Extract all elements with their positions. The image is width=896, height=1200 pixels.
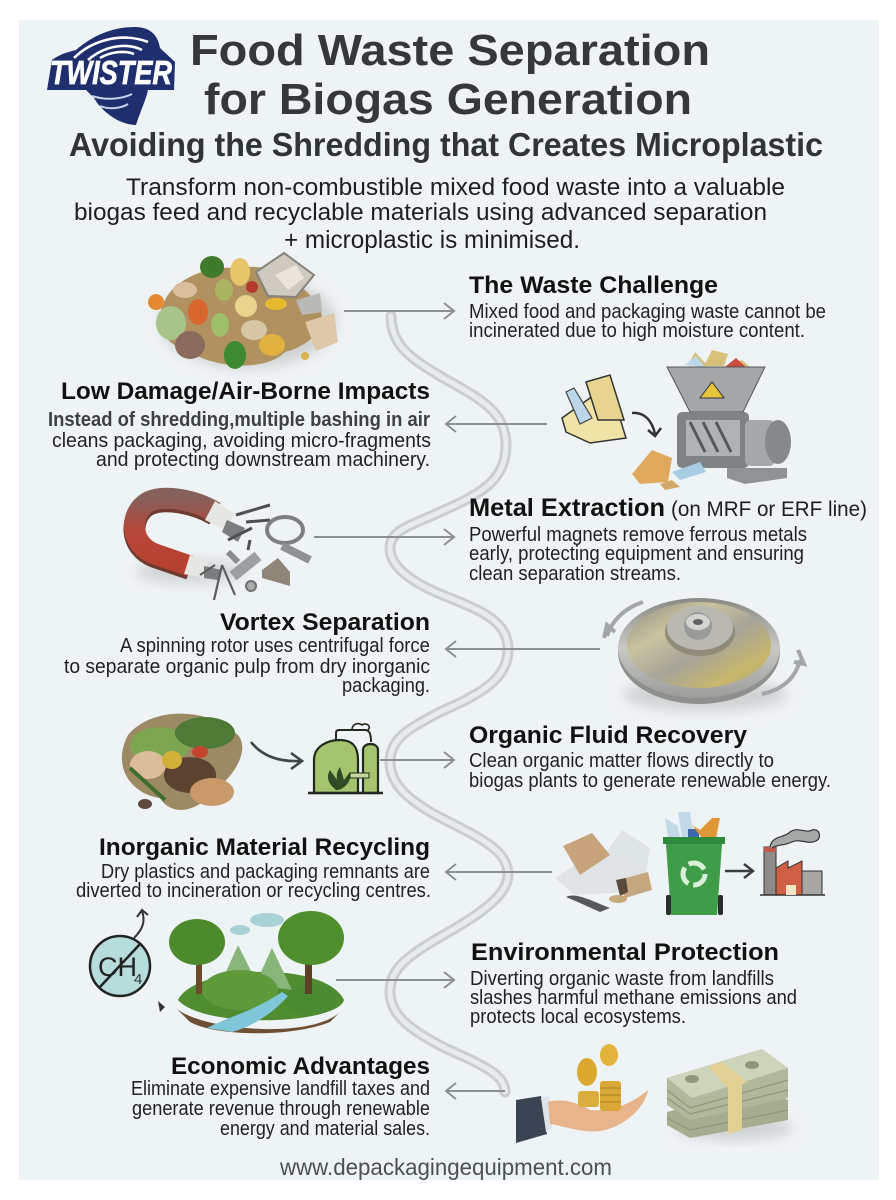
text: metal extraction: Metal Extraction <box>469 494 665 522</box>
text: metal extraction: early, protecting equipment and ensuring <box>469 543 804 565</box>
icon: mixed food waste pile <box>148 253 338 369</box>
text: inorganic material recycling: Dry plastics and packaging remnants are <box>101 861 430 883</box>
text: vortex separation: A spinning rotor uses centrifugal force <box>120 635 430 657</box>
text: environmental protection <box>470 939 797 1028</box>
text: economic advantages: generate revenue through renewable <box>132 1098 430 1120</box>
subtitle: Avoiding the Shredding that Creates Microplastic <box>69 126 823 163</box>
text: inorganic material recycling: Inorganic Material Recycling <box>99 834 430 861</box>
icon: packaging, recycling bin and factory <box>555 812 825 915</box>
arrow: shredder to low damage <box>446 416 547 432</box>
text: organic fluid recovery: Organic Fluid Recovery <box>469 722 748 749</box>
text: economic advantages: Economic Advantages <box>171 1053 430 1080</box>
text: metal extraction: Powerful magnets remove ferrous metals <box>469 524 807 546</box>
icon: organic waste and biogas plant <box>122 714 383 810</box>
text: the waste challenge: The Waste Challenge <box>469 272 718 299</box>
text: the waste challenge: incinerated due to high moisture content. <box>469 320 805 342</box>
text: environmental protection: slashes harmful methane emissions and <box>470 987 797 1009</box>
icon: methane crossed out: CH <box>98 952 137 982</box>
text: low damage air-borne impacts <box>48 378 431 471</box>
text: organic fluid recovery <box>469 722 831 792</box>
arrow: food to waste challenge <box>344 303 454 319</box>
text: economic advantages: Eliminate expensive landfill taxes and <box>131 1078 430 1100</box>
text: organic fluid recovery: Clean organic matter flows directly to <box>469 750 774 772</box>
text: environmental protection: protects local ecosystems. <box>470 1006 686 1028</box>
icon: magnet with metal scraps <box>134 498 310 600</box>
intro text: + microplastic is minimised. <box>284 226 580 254</box>
text: the waste challenge: Mixed food and packaging waste cannot be <box>469 301 826 323</box>
icon: methane crossed out <box>90 910 165 1012</box>
arrow: money to economic advantages <box>446 1083 505 1099</box>
title: Food Waste Separation <box>190 26 710 75</box>
intro text: biogas feed and recyclable materials using advanced separation <box>74 199 767 226</box>
text: environmental protection: Environmental Protection <box>471 939 779 966</box>
title <box>190 26 710 124</box>
icon: hand with coins <box>516 1044 648 1143</box>
title: for Biogas Generation <box>204 75 692 124</box>
icon: packaging and shredder <box>562 350 791 490</box>
text: metal extraction: (on MRF or ERF line) <box>671 498 867 521</box>
text: organic fluid recovery: biogas plants to generate renewable energy. <box>469 770 831 792</box>
footer url: www.depackagingequipment.com <box>279 1154 612 1180</box>
text: economic advantages <box>131 1053 430 1140</box>
text: vortex separation: packaging. <box>342 675 430 697</box>
text: vortex separation <box>64 609 430 697</box>
text: metal extraction: clean separation streams. <box>469 563 681 585</box>
icon: methane crossed out: 4 <box>134 971 142 988</box>
text: metal extraction <box>469 494 867 585</box>
text: economic advantages: energy and material sales. <box>220 1118 430 1140</box>
icon: green landscape island <box>169 911 344 1033</box>
logo: Twister <box>47 27 175 125</box>
connecting ribbon path <box>390 316 508 1092</box>
text: the waste challenge <box>469 272 826 342</box>
text: environmental protection: Diverting organic waste from landfills <box>470 968 774 990</box>
text: low damage air-borne impacts: Instead of shredding,multiple bashing in air <box>48 409 430 431</box>
arrow: biogas to organic fluid recovery <box>380 752 454 768</box>
arrow: landscape to environmental protection <box>336 972 454 988</box>
arrow: recycling to inorganic material <box>446 864 552 880</box>
arrow: rotor to vortex separation <box>446 641 600 657</box>
text: low damage air-borne impacts: cleans packaging, avoiding micro-fragments <box>52 430 431 452</box>
text: low damage air-borne impacts: Low Damage/Air-Borne Impacts <box>61 378 430 405</box>
intro text <box>74 174 785 254</box>
icon: stacks of cash <box>667 1049 793 1140</box>
icon: spinning rotor <box>604 598 804 711</box>
text: vortex separation: Vortex Separation <box>220 609 430 636</box>
text: vortex separation: to separate organic pulp from dry inorganic <box>64 656 430 678</box>
logo: Twister: TWISTER <box>50 54 172 91</box>
text: inorganic material recycling <box>76 834 431 902</box>
text: inorganic material recycling: diverted to incineration or recycling centres. <box>76 880 431 902</box>
intro text: Transform non-combustible mixed food waste into a valuable <box>126 174 785 201</box>
arrow: magnet to metal extraction <box>314 529 454 545</box>
text: low damage air-borne impacts: and protecting downstream machinery. <box>96 449 430 471</box>
